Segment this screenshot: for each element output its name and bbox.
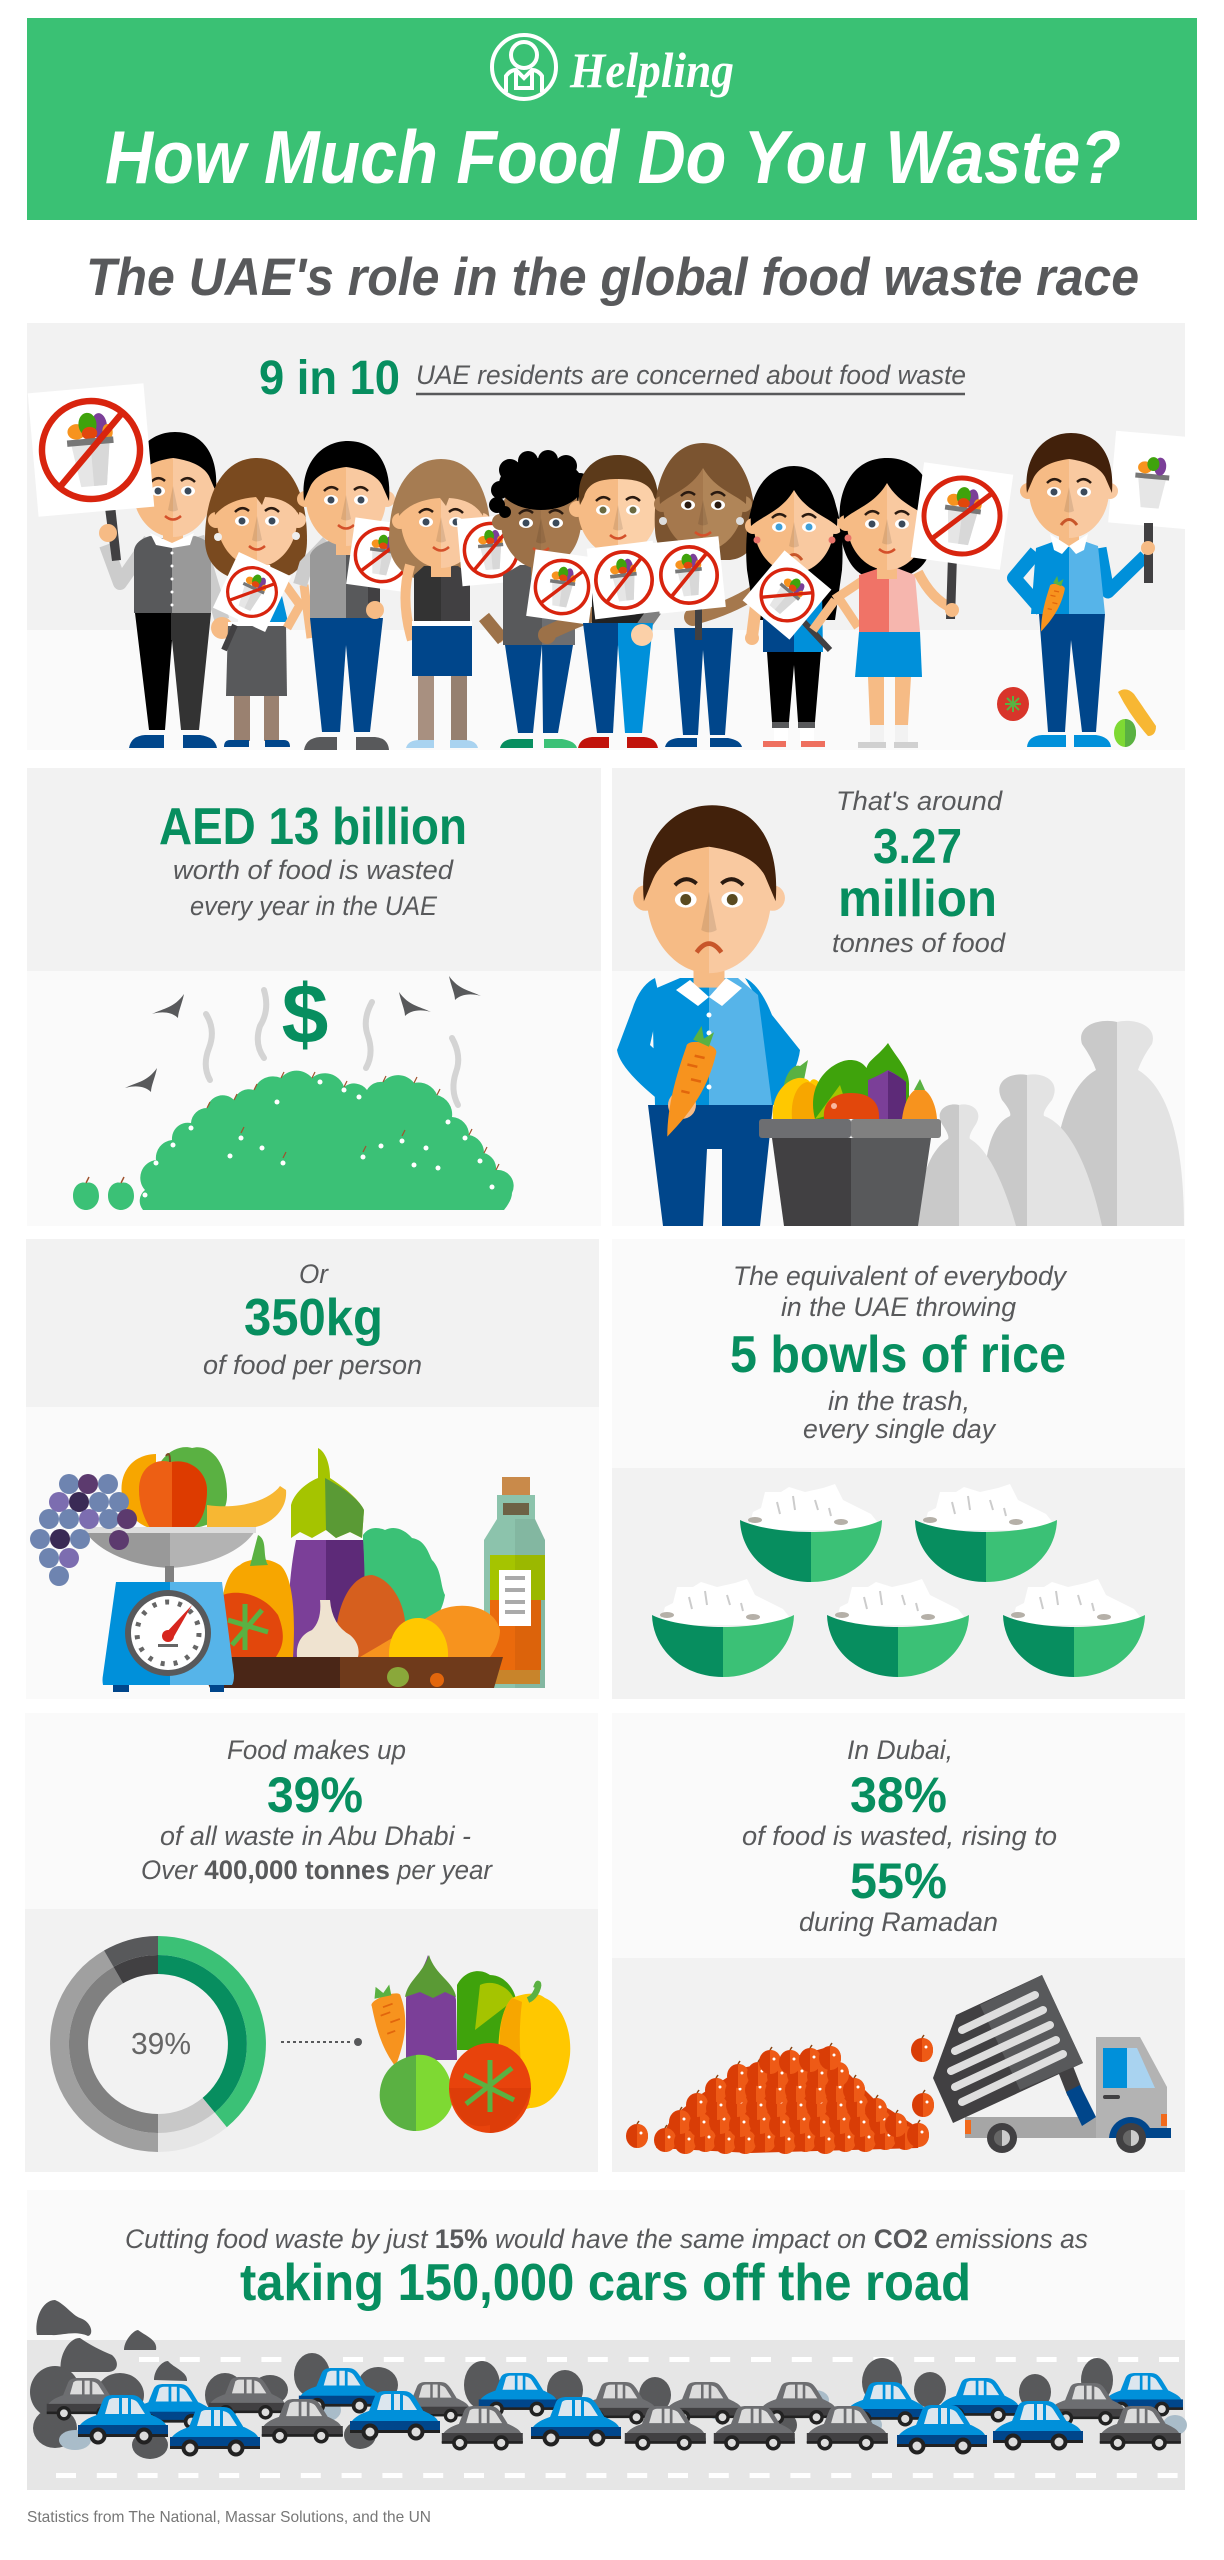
Helpling wordmark: Helpling [569,42,734,98]
caption: cutting food waste: Cutting food waste by just 15% would have the same impact on CO2 emissions as [125,2224,1088,2254]
vegetables [363,1955,570,2133]
stat: 3.27 million [838,820,997,928]
person 3 [297,441,418,750]
caption: concerned residents: UAE residents are concerned about food waste [416,360,966,390]
caption: in the trash: in the trash, [828,1386,970,1416]
icon: green apple [1114,719,1136,747]
sub-element: tomato with star [223,1593,283,1657]
sub-element: banana [207,1486,286,1528]
person 6 [569,455,667,748]
caption: during Ramadan: during Ramadan [799,1907,998,1937]
sub-element: eggplant [288,1448,364,1657]
sub-element: pepper [220,1535,294,1657]
stat: 9 in 10: 9 in 10 [259,352,400,405]
header banner [27,18,1197,220]
person 10: sad man with carrot [1014,431,1194,747]
icon: tomato [997,687,1029,721]
loose apples [73,1177,134,1210]
caption: in the trash: every single day [803,1414,996,1444]
sub-element: blue scale [102,1582,234,1692]
rice bowls [652,1484,1145,1677]
caption: all waste in Abu Dhabi: Over 400,000 tonnes per year [141,1855,493,1885]
dotted connector [281,2038,362,2046]
caption: food makes up: Food makes up [227,1735,406,1765]
panel: 39% Abu Dhabi [25,1713,598,2172]
sub-element: scale bowl [84,1527,256,1584]
sub-element: orange [122,1454,156,1530]
sub-element: grapes [30,1474,137,1586]
food-filled bin [759,1043,941,1226]
dump truck [933,1975,1171,2153]
stat: taking 150,000 cars off the road: taking 150,000 cars off the road [240,2254,971,2312]
stink lines [206,990,458,1105]
stat: 350kg: 350kg [244,1289,383,1347]
sub-element: red apple [139,1454,207,1528]
caption: worth of food wasted [173,855,454,921]
caption: all waste in Abu Dhabi: of all waste in Abu Dhabi - [160,1821,471,1851]
sub-element: garlic [297,1600,359,1657]
person 7 [652,443,755,747]
caption: in the trash [803,1386,996,1444]
panel: AED 13 billion [27,768,601,1226]
sub-element: lettuce [363,1528,445,1660]
stat: AED 13 billion: AED 13 billion [159,798,467,856]
stat: 3.27 million: million [838,870,997,928]
panel: Dubai Ramadan [612,1713,1185,2172]
subtitle: The UAE's role in the global food waste race [86,248,1139,307]
caption: that's around: That's around [836,786,1003,816]
caption: equivalent: in the UAE throwing [781,1292,1016,1322]
panel: 3.27 million tonnes [612,768,1185,1226]
caption: all waste in Abu Dhabi [141,1821,493,1885]
sub-element: bottle [484,1477,545,1688]
panel: 350kg per person [26,1239,599,1699]
sub-element: chopping board [195,1657,503,1688]
caption: worth of food wasted: every year in the UAE [190,891,438,921]
caption: equivalent: The equivalent of everybody [733,1261,1067,1291]
caption: per person: of food per person [203,1350,422,1380]
stat: 3.27 million: 3.27 [873,820,962,874]
person 1 [28,383,233,748]
sub-element: carrot [360,1606,500,1657]
exhaust smoke [30,2300,1113,2459]
person 9 [838,458,1013,748]
caption: worth of food wasted: worth of food is wasted [173,855,454,885]
caption: tonnes of food: tonnes of food [832,928,1006,958]
icon: baguette [1118,689,1156,736]
stat: 38%: 38% [850,1767,947,1823]
food on a scale [30,1447,545,1692]
caption: food is wasted: of food is wasted, rising to [742,1821,1057,1851]
icon: dollar sign: $ [282,967,328,1061]
donut chart [50,1936,266,2152]
donut label: 39% [131,2026,191,2061]
panel: cars off the road [27,2190,1187,2490]
sub-element: hand and carrot [663,1023,721,1143]
person 2 [205,458,307,747]
panel: 9 in 10 residents [27,323,1194,750]
person 5 [484,450,598,748]
title: How Much Food Do You Waste? [105,115,1121,199]
birds [125,976,481,1092]
stat: 39%: 39% [267,1767,363,1823]
stat: 55%: 55% [850,1853,947,1909]
caption: in Dubai: In Dubai, [847,1735,953,1765]
sub-element: brown tomato [335,1575,405,1657]
caption: or: Or [299,1259,329,1289]
sad man holding carrot [617,805,800,1226]
flying tomatoes [626,2035,934,2148]
caption: equivalent [733,1261,1067,1322]
source note: Statistics from The National, Massar Solutions, and the UN [27,2509,431,2526]
apple pile [140,1071,514,1210]
sub-element: yellow pepper [389,1618,448,1657]
garbage bags [918,1021,1184,1226]
person 4 [389,459,525,748]
traffic jam cars [47,2368,1183,2456]
tomato pile [654,2043,929,2154]
Helpling logo icon [492,35,556,99]
person 8 [743,466,843,747]
panel: 5 bowls of rice [612,1239,1185,1699]
sub-element: green apple [152,1447,227,1528]
stat: 5 bowls of rice: 5 bowls of rice [730,1326,1066,1384]
